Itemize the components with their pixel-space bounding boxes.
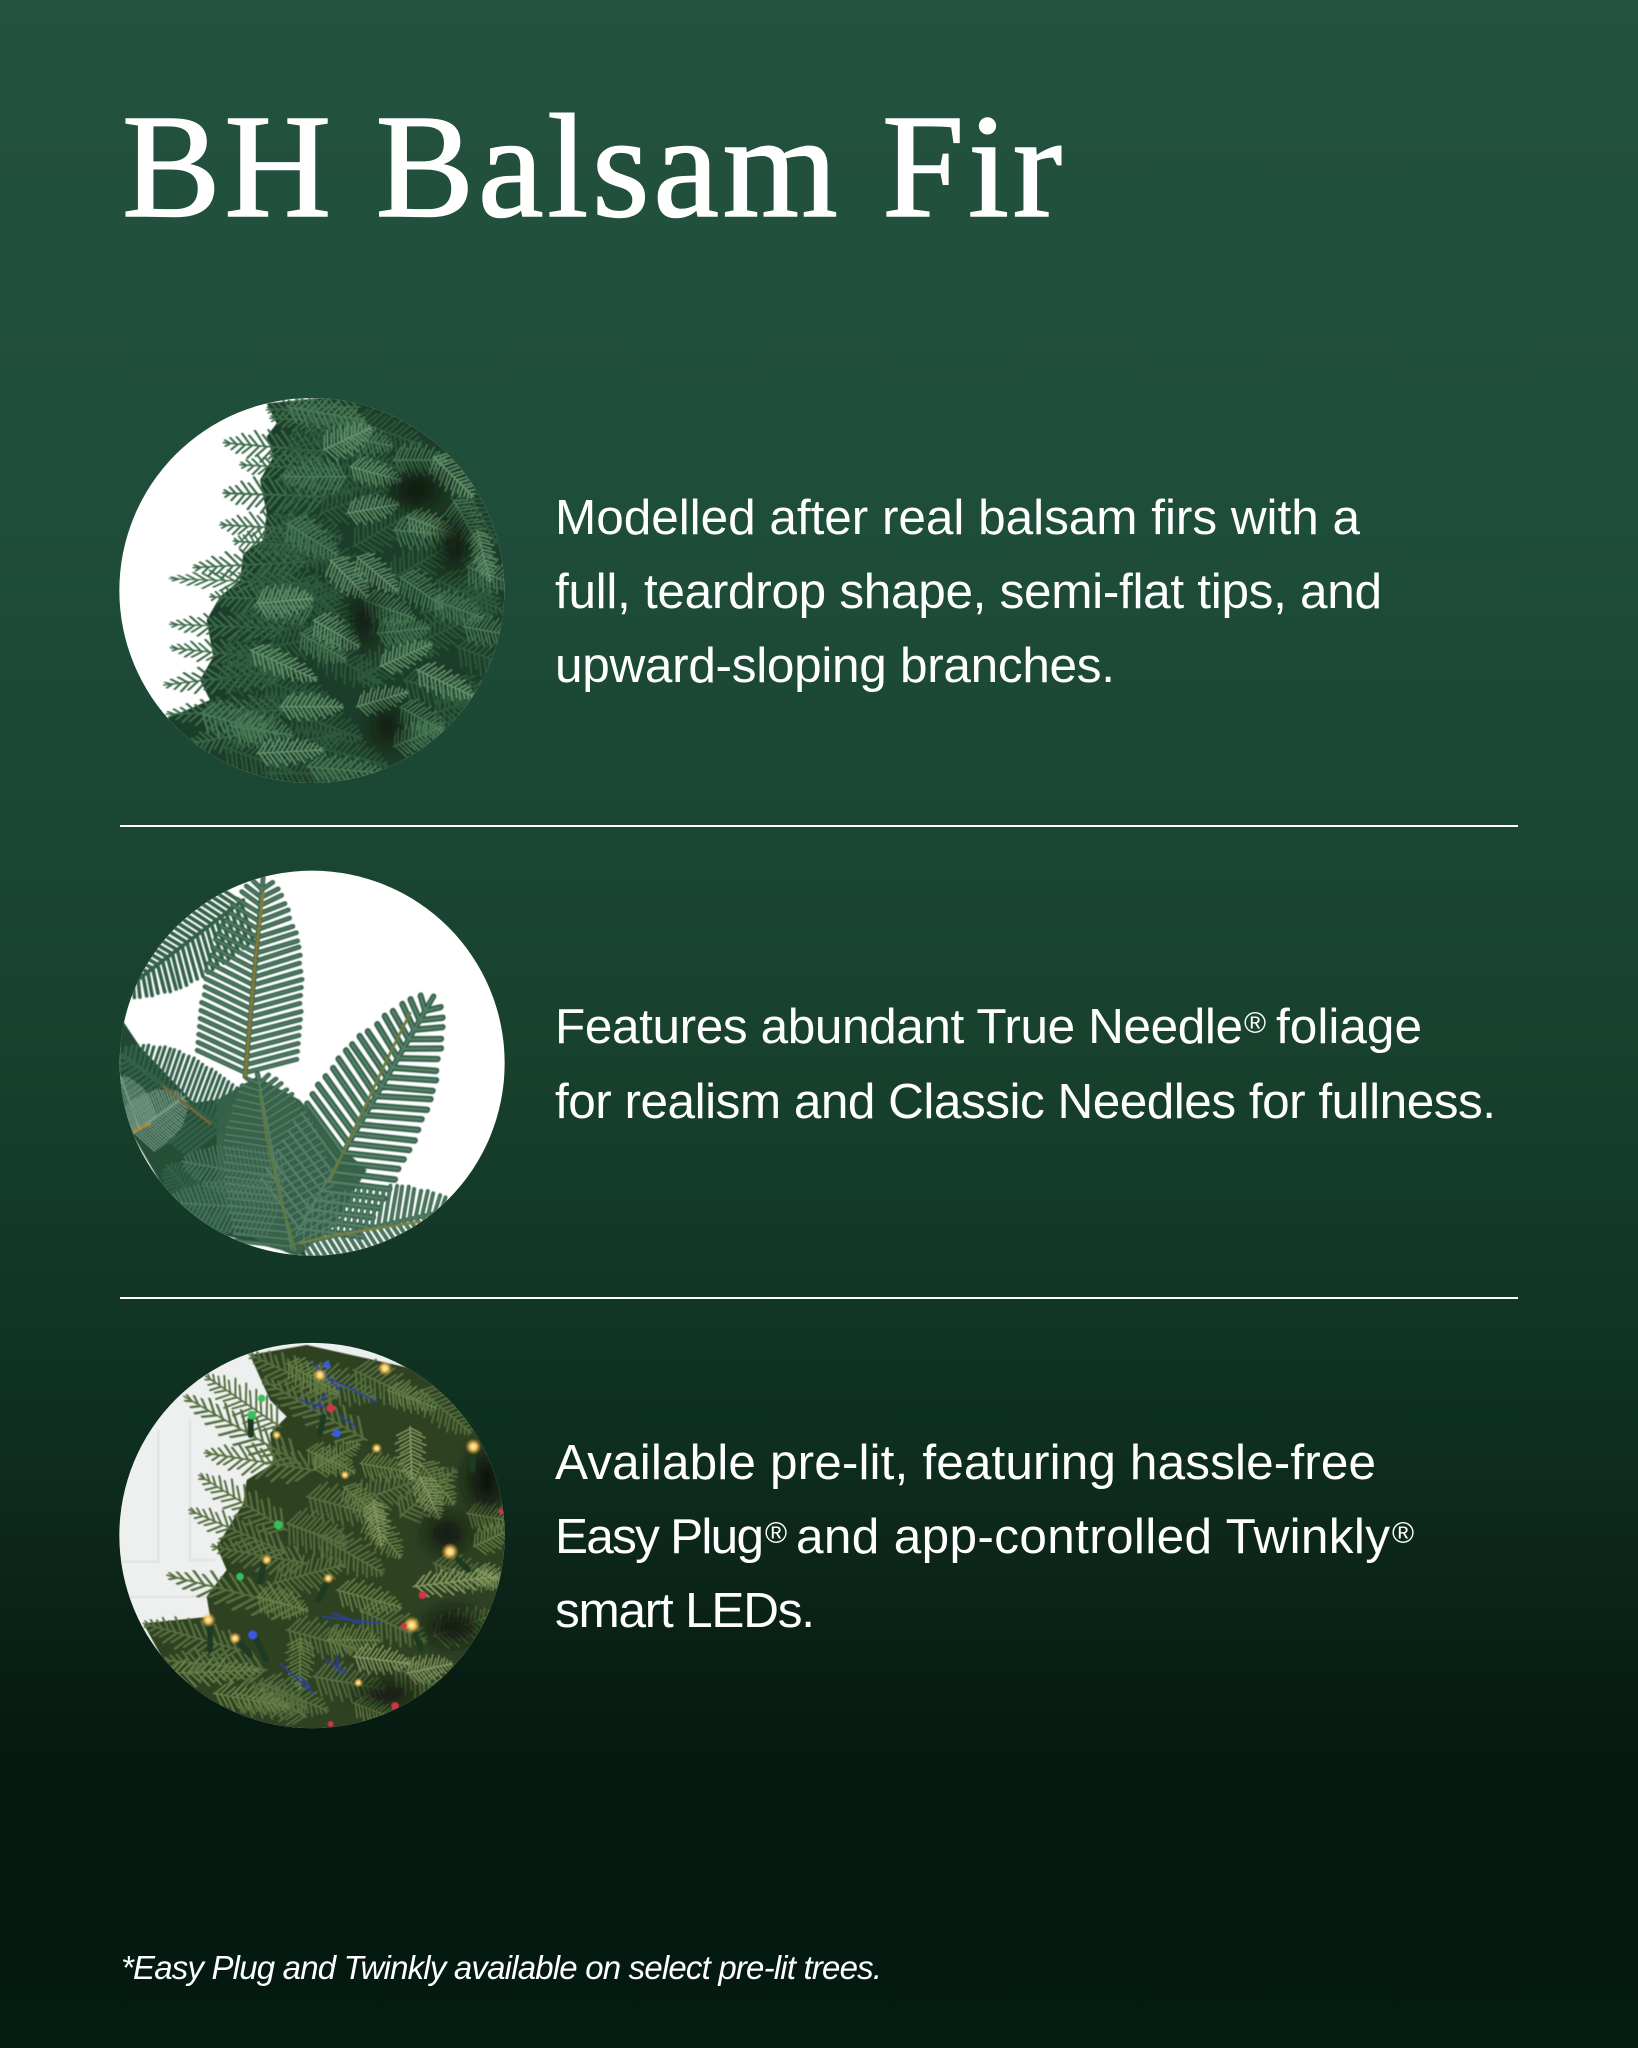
text block: lighting description: Available pre-lit, featuring hassle-free xyxy=(555,1435,1376,1490)
registered mark: ® xyxy=(1392,1517,1414,1550)
text block: lighting description: and app-controlled Twinkly xyxy=(796,1509,1390,1564)
text block: needle description: foliage xyxy=(1276,999,1422,1054)
text block: shape description: full, teardrop shape, semi-flat tips, and xyxy=(555,564,1382,619)
warm bulbs xyxy=(313,1368,327,1382)
dark shadows in tree interior xyxy=(468,1450,505,1510)
blue bulbs xyxy=(323,1362,330,1368)
text block: shape description xyxy=(555,490,1382,693)
photo: full balsam fir tree xyxy=(119,398,504,783)
panel: pre-lit lights xyxy=(113,1337,1414,1743)
footnote: *Easy Plug and Twinkly available on select pre-lit trees. xyxy=(121,1949,882,1986)
panel: needles xyxy=(94,867,1496,1284)
registered mark: ® xyxy=(1244,1007,1266,1040)
text block: lighting description: smart LEDs. xyxy=(555,1583,815,1638)
text block: lighting description: Easy Plug xyxy=(555,1509,764,1564)
text block: shape description: upward-sloping branches. xyxy=(555,638,1115,693)
text block: shape description: Modelled after real balsam firs with a xyxy=(555,490,1360,545)
branch stems xyxy=(245,893,263,1077)
bulb sockets xyxy=(210,1417,473,1659)
registered mark: ® xyxy=(765,1517,787,1550)
photo: pre-lit fir with coloured bulbs xyxy=(119,1342,505,1728)
text block: needle description: for realism and Classic Needles for fullness. xyxy=(555,1074,1496,1129)
panel: tree shape xyxy=(113,390,1382,806)
text block: needle description xyxy=(555,999,1496,1129)
photo: close-up fir branch xyxy=(120,870,505,1256)
green bulbs xyxy=(247,1411,256,1419)
red bulbs xyxy=(327,1404,335,1412)
blue light reflections xyxy=(300,1363,377,1427)
text block: needle description: Features abundant True Needle xyxy=(555,999,1243,1054)
text block: lighting description xyxy=(555,1435,1414,1638)
title: BH Balsam Fir xyxy=(122,85,1062,249)
dark shadows in tree interior xyxy=(393,472,440,508)
